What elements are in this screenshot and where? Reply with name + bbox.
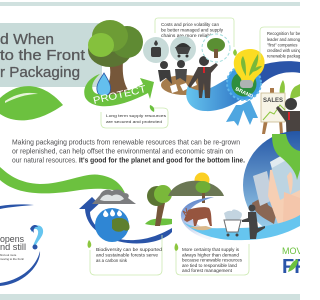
text box: long term supply: are secured and protected — [106, 119, 162, 124]
title panel — [0, 23, 102, 87]
icon: running person — [242, 204, 265, 239]
icon: deer — [183, 207, 212, 230]
top right green swoosh — [272, 134, 300, 180]
intro paragraph — [12, 138, 245, 164]
call to action text — [0, 234, 26, 261]
icon: globe with cloud and arrow — [79, 190, 172, 243]
photo circle with hands and packaging — [243, 131, 300, 226]
title panel: to the Front — [0, 47, 86, 64]
text box: costs and price: be better managed and supply — [161, 28, 224, 32]
sales easel with person: SALES — [263, 98, 283, 104]
text box: recognition — [260, 27, 310, 60]
meeting table with people — [158, 60, 209, 95]
sales easel with person — [261, 80, 300, 150]
title panel: d When — [0, 31, 54, 48]
top band — [0, 2, 300, 6]
icon: protect tree with arrow: PROTECT — [92, 84, 147, 107]
river and light blue swoosh — [181, 197, 300, 240]
text box: biodiversity: Biodiversity can be supported — [96, 247, 163, 252]
call to action text: opens — [0, 234, 24, 244]
thin blue arc — [0, 204, 34, 209]
text box: biodiversity: as a carbon sink — [96, 258, 128, 263]
intro paragraph: or replenished, can help offset the environmental and economic strain on — [12, 146, 233, 156]
text box: biodiversity — [90, 235, 163, 275]
icon: tree bubble — [202, 34, 230, 62]
text box: more certainty — [176, 244, 249, 275]
icon: brand light bulb and rosette — [226, 49, 265, 126]
text box: recognition: "first" companies — [267, 42, 297, 48]
green swoosh — [0, 167, 125, 193]
icon: box leaf — [233, 49, 237, 56]
text box: more certainty: because renewable resources — [182, 258, 242, 263]
bottom band — [0, 294, 300, 300]
call to action text: moving to the front/ — [0, 257, 24, 261]
blue ribbon swoosh — [186, 76, 250, 111]
call to action text: nd still — [0, 242, 26, 252]
text box: more certainty: always higher than demand — [182, 252, 240, 257]
icon: brand light bulb and rosette: BRAND — [234, 86, 254, 100]
text box: biodiversity: and sustainable forests serve — [96, 252, 159, 258]
text box: costs and price: Costs and price volatility can — [161, 22, 220, 27]
icon: large green leaf — [0, 86, 63, 120]
text box: more certainty: and forest management — [182, 268, 233, 273]
text box: more certainty: are tied to responsible land — [182, 263, 238, 268]
person standing — [188, 56, 218, 98]
icon: oil bubble — [143, 37, 169, 63]
icon: biodiversity leaf — [88, 240, 91, 248]
icon: small green leaf — [150, 105, 154, 112]
text box: recognition: credited with using — [267, 48, 300, 53]
text box: costs and price — [155, 18, 234, 47]
text box: long term supply — [101, 108, 168, 128]
logo: moving forward — [282, 246, 309, 278]
icon: tree by globe — [145, 185, 172, 226]
icon: hills sun and tree — [168, 172, 224, 203]
icon: protect tree with arrow — [84, 20, 154, 107]
icon: more certainty leaf — [174, 243, 178, 251]
icon: question mark swoosh — [0, 225, 43, 286]
icon: shopping cart — [224, 209, 242, 236]
text box: long term supply: Long term supply resources — [106, 113, 166, 118]
text box: costs and price: chains are more reliable — [161, 33, 215, 38]
title panel: r Packaging — [0, 64, 80, 81]
intro paragraph: Making packaging products from renewable resources that can be re-grown — [12, 138, 240, 146]
intro paragraph: our natural resources. It's good for the planet and good for the bottom line. — [12, 156, 245, 164]
text box: more certainty: More certainty that supply is — [182, 247, 239, 252]
icon: coal cart bubble — [170, 36, 196, 62]
dark blue swoosh — [226, 61, 300, 92]
call to action text: find out more — [0, 253, 17, 257]
